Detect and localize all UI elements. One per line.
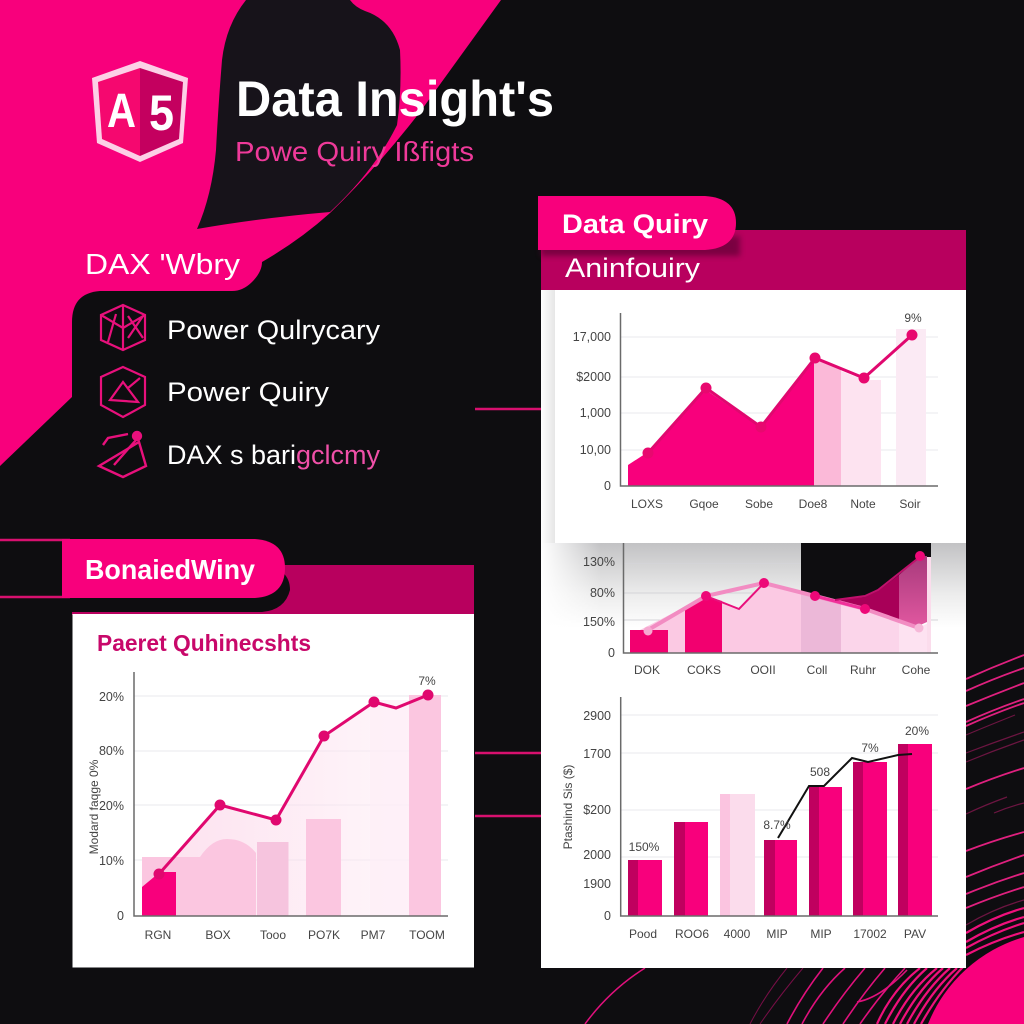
dark bar bbox=[142, 872, 176, 916]
bars bbox=[142, 695, 441, 916]
side shading bbox=[541, 290, 555, 543]
x labels: Sobe bbox=[745, 497, 773, 511]
subtitle: Powe Quiry Ißfigts bbox=[235, 136, 474, 167]
x labels: Coll bbox=[807, 663, 827, 677]
y labels: 0 bbox=[608, 646, 615, 660]
x labels: ROO6 bbox=[675, 927, 709, 941]
y labels: 1900 bbox=[583, 877, 611, 891]
card body bbox=[72, 614, 474, 968]
y labels: 17,000 bbox=[573, 330, 611, 344]
middle chart backdrop bbox=[541, 543, 966, 628]
bars bbox=[628, 744, 932, 916]
text: item one: Power Qulrycary bbox=[167, 315, 381, 345]
y labels: 20% bbox=[99, 690, 124, 704]
y labels: $200 bbox=[583, 803, 611, 817]
chart sheet bbox=[555, 290, 966, 543]
value labels: 8.7% bbox=[763, 818, 791, 832]
x labels bbox=[631, 497, 921, 511]
value label: 9% bbox=[904, 311, 922, 325]
light bars bbox=[814, 329, 926, 486]
x labels: MIP bbox=[766, 927, 788, 941]
x labels: Pood bbox=[629, 927, 657, 941]
card header bar bbox=[72, 565, 474, 615]
light area bbox=[640, 583, 931, 653]
value labels: 150% bbox=[629, 840, 660, 854]
card header bar bbox=[541, 230, 966, 291]
y axis title: Ptashind Sis ($) bbox=[561, 765, 575, 849]
y labels: 80% bbox=[590, 586, 615, 600]
x labels: COKS bbox=[687, 663, 721, 677]
decorative pink circle bbox=[928, 937, 1024, 1024]
value labels: 7% bbox=[861, 741, 879, 755]
logo: hexagon shield: 5 bbox=[149, 85, 174, 141]
axes bbox=[134, 672, 448, 916]
x labels: Ruhr bbox=[850, 663, 876, 677]
y labels: 0 bbox=[117, 909, 124, 923]
icon: cube bbox=[101, 305, 145, 350]
y labels bbox=[573, 330, 611, 493]
x labels: Gqoe bbox=[689, 497, 719, 511]
y labels: 1700 bbox=[583, 747, 611, 761]
y labels: 80% bbox=[99, 744, 124, 758]
y labels bbox=[583, 709, 611, 923]
x labels: RGN bbox=[145, 928, 171, 942]
text: item two: Power Quiry bbox=[167, 377, 330, 407]
y labels: 0 bbox=[604, 479, 611, 493]
x labels: Note bbox=[850, 497, 876, 511]
y labels: 0 bbox=[604, 909, 611, 923]
title: Data Insight's bbox=[236, 71, 554, 127]
y labels: 10% bbox=[99, 854, 124, 868]
tab bbox=[538, 196, 736, 250]
x labels: Soir bbox=[899, 497, 921, 511]
list: features bbox=[99, 305, 381, 477]
x labels: DOK bbox=[634, 663, 660, 677]
x labels: 17002 bbox=[853, 927, 887, 941]
y labels: 2000 bbox=[583, 848, 611, 862]
bars bbox=[630, 596, 722, 653]
area chart bbox=[87, 672, 448, 942]
chart: middle combo chart bbox=[583, 543, 938, 677]
area fill bbox=[142, 702, 409, 916]
pink background shape bbox=[0, 0, 501, 466]
value labels: 20% bbox=[905, 724, 929, 738]
x labels: OOII bbox=[750, 663, 776, 677]
dark wedge bbox=[835, 575, 899, 620]
value label: 7% bbox=[418, 674, 436, 688]
panel: right card bbox=[538, 196, 966, 968]
x labels: Doe8 bbox=[799, 497, 828, 511]
x labels: Tooo bbox=[260, 928, 286, 942]
x labels: PO7K bbox=[308, 928, 340, 942]
x labels: TOOM bbox=[409, 928, 445, 942]
line series bbox=[154, 690, 434, 880]
x labels: 4000 bbox=[724, 927, 751, 941]
icon: hexagon triangle bbox=[101, 367, 145, 417]
x labels: MIP bbox=[810, 927, 832, 941]
axes bbox=[620, 313, 938, 486]
section heading: DAX 'Wbry bbox=[85, 249, 241, 281]
y labels: 150% bbox=[583, 615, 615, 629]
tab label: Data Quiry bbox=[562, 209, 708, 239]
tab shadow bbox=[72, 565, 290, 612]
y labels: 130% bbox=[583, 555, 615, 569]
line series bbox=[644, 551, 925, 636]
chart: bottom bar chart bbox=[561, 697, 938, 941]
x labels: PAV bbox=[904, 927, 926, 941]
y labels bbox=[99, 690, 124, 923]
y labels: $2000 bbox=[576, 370, 611, 384]
x labels: BOX bbox=[205, 928, 231, 942]
value labels bbox=[629, 724, 929, 854]
chart: top area chart bbox=[541, 290, 966, 543]
area fill bbox=[628, 360, 814, 486]
tab label: BonaiedWiny bbox=[85, 554, 255, 585]
right edge strip bbox=[927, 557, 931, 653]
decorative swirl lines bottom bbox=[585, 966, 964, 1024]
logo: hexagon shield bbox=[92, 61, 188, 162]
y labels: 2900 bbox=[583, 709, 611, 723]
panel: left card bbox=[62, 539, 474, 968]
logo: hexagon shield: A bbox=[107, 85, 136, 138]
axes bbox=[621, 697, 938, 916]
axes bbox=[624, 543, 938, 653]
x labels bbox=[629, 927, 926, 941]
line series bbox=[642, 330, 918, 458]
gradient wedge bbox=[899, 556, 927, 626]
y axis title: Modard faqge 0% bbox=[87, 759, 101, 854]
y labels: 1,000 bbox=[580, 406, 611, 420]
x labels: Cohe bbox=[902, 663, 931, 677]
y labels bbox=[583, 555, 615, 660]
decorative swirl lines right bbox=[966, 655, 1024, 955]
tab bbox=[62, 539, 285, 598]
y labels: 10,00 bbox=[580, 443, 611, 457]
text: item three: DAX s barigclcmy bbox=[167, 440, 380, 470]
x labels bbox=[634, 663, 931, 677]
x labels: LOXS bbox=[631, 497, 663, 511]
x labels bbox=[145, 928, 445, 942]
y labels: 20% bbox=[99, 799, 124, 813]
x labels: PM7 bbox=[361, 928, 386, 942]
header label: Aninfouiry bbox=[565, 253, 701, 283]
value labels: 508 bbox=[810, 765, 830, 779]
card title: Paeret Quhinecshts bbox=[97, 630, 311, 656]
tab shadow bbox=[541, 236, 740, 256]
icon: map pin bbox=[99, 432, 146, 477]
connector lines bbox=[0, 409, 541, 816]
card body bbox=[541, 290, 966, 968]
trend line bbox=[778, 754, 912, 838]
dark blob behind title bbox=[197, 0, 401, 229]
